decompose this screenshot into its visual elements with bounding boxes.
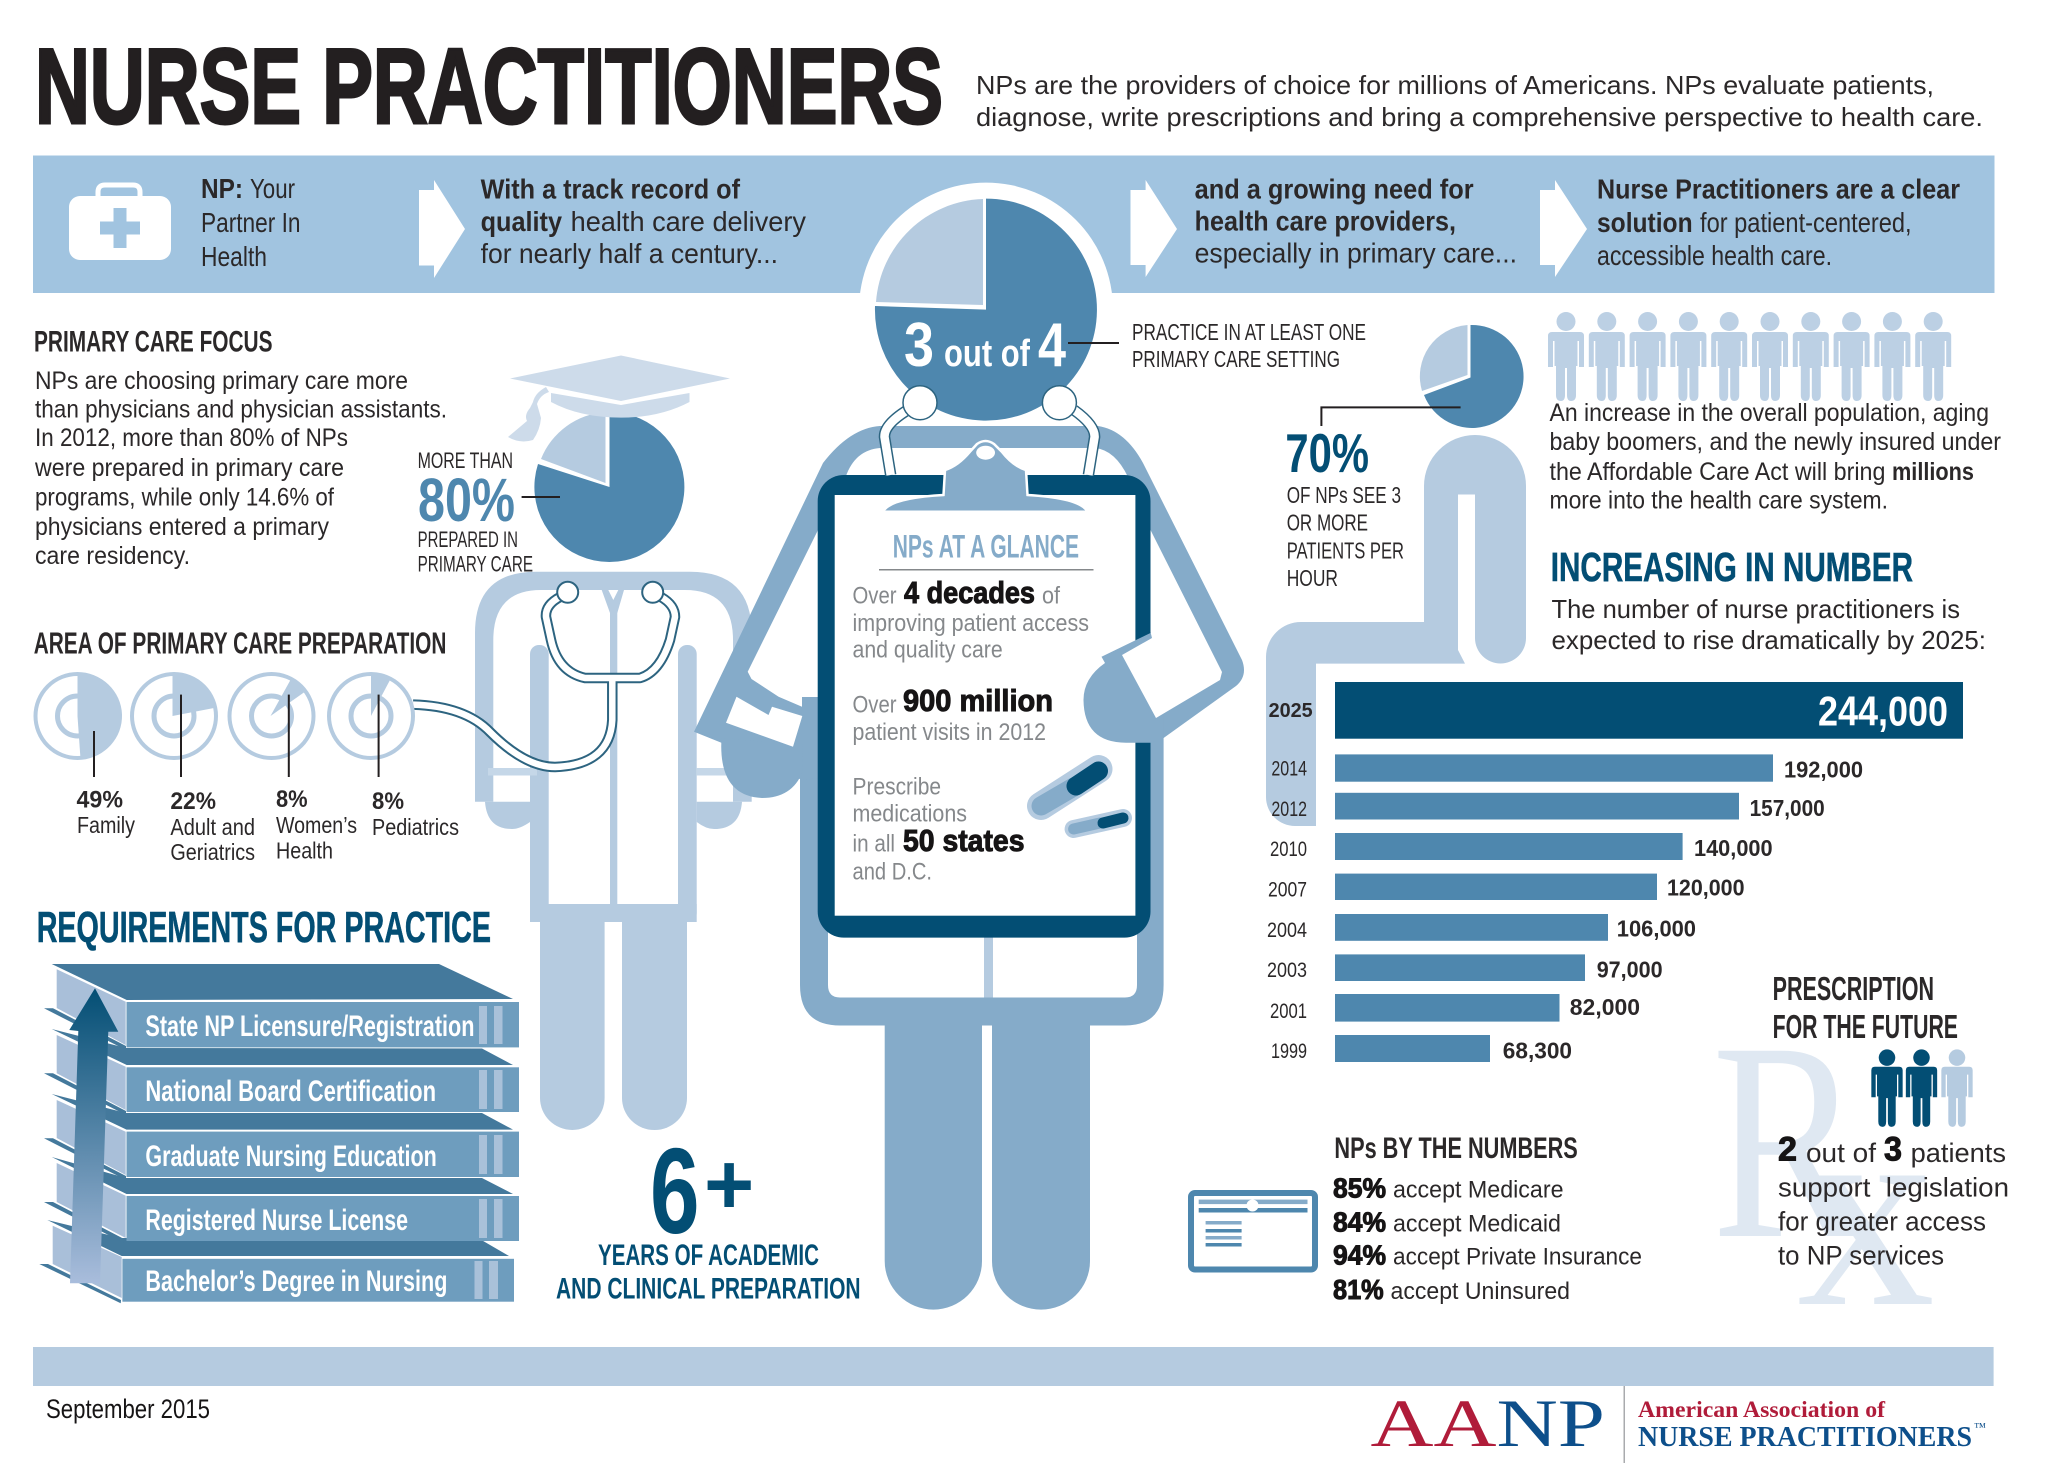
chart: pediatrics 8 percent: Pediatrics: [372, 814, 459, 840]
nps at a glance: 4 decades: [904, 575, 1035, 610]
bar chart: nurse practitioners by year: [1267, 682, 1963, 1063]
chart: pediatrics 8 percent: 8%: [372, 788, 404, 815]
nps at a glance: patient visits in 2012: [852, 719, 1046, 746]
book: state licensure: State NP Licensure/Registration: [145, 1010, 474, 1043]
coat: [800, 697, 1164, 1026]
population text: millions: [1892, 458, 1974, 486]
document in left hand: [726, 697, 802, 747]
increasing in number: The number of nurse practitioners is: [1552, 594, 1960, 624]
years of preparation: YEARS OF ACADEMIC: [598, 1239, 819, 1272]
nps at a glance: 50 states: [903, 823, 1024, 858]
figure: seated patient: [1266, 325, 1526, 826]
population text: the Affordable Care Act will bring: [1550, 458, 1885, 486]
bar 2007: 120,000: [1667, 875, 1744, 901]
70 percent callout: HOUR: [1287, 565, 1338, 591]
book: bachelor's degree: [39, 1220, 514, 1303]
nps at a glance: of: [1042, 582, 1060, 610]
80 percent callout: MORE THAN: [418, 448, 513, 473]
chart: family 49 percent: [36, 673, 135, 838]
prescription for the future: patients: [1911, 1138, 2006, 1168]
banner text: solution: for patient-centered,: [1700, 207, 1912, 238]
bar 2001: 2001: [1270, 1000, 1307, 1023]
book: registered nurse license: Registered Nurse License: [145, 1204, 408, 1237]
book: national board certification: [44, 1029, 519, 1115]
nps at a glance: Prescribe: [852, 774, 941, 800]
requirements heading: REQUIREMENTS FOR PRACTICE: [37, 903, 491, 952]
nps at a glance: Over: [852, 582, 896, 610]
increasing in number: expected to rise dramatically by 2025:: [1552, 625, 1986, 655]
nps at a glance: in all: [852, 830, 895, 858]
population text: more into the health care system.: [1550, 486, 1888, 514]
figure: central nurse: [694, 426, 1244, 1310]
icon: insurance card: [1191, 1193, 1315, 1270]
icon: pills: [1041, 769, 1123, 829]
nps by the numbers: 85%: [1333, 1172, 1386, 1204]
70 percent callout: 70%: [1285, 422, 1369, 484]
chart: adult and geriatrics 22 percent: Adult and: [170, 814, 255, 840]
80 percent callout: PREPARED IN: [418, 527, 518, 552]
primary care focus: programs, while only 14.6% of: [35, 484, 334, 512]
banner text: solution: Nurse Practitioners are a clear: [1597, 174, 1960, 205]
practice setting callout: PRACTICE IN AT LEAST ONE: [1132, 319, 1366, 345]
banner text: partner: [201, 173, 300, 272]
bar 2007: 2007: [1268, 879, 1307, 902]
rx watermark: [1712, 985, 1935, 1365]
pie: three out of four: 4: [1038, 311, 1066, 380]
book: bachelor's degree: Bachelor’s Degree in Nursing: [145, 1265, 447, 1298]
banner text: partner: NP:: [201, 173, 243, 204]
bar 2010: [1270, 833, 1773, 861]
chart: family 49 percent: Family: [77, 812, 135, 838]
bar 2003: [1267, 954, 1663, 982]
nps at a glance: and D.C.: [852, 858, 932, 886]
chart: family 49 percent: 49%: [76, 786, 123, 814]
clip hole: [976, 446, 995, 460]
bar 2012: 157,000: [1750, 795, 1825, 821]
nps at a glance: 900 million: [903, 683, 1053, 718]
left hand: [721, 738, 803, 798]
logo: AANP: American Association of: [1638, 1397, 1885, 1422]
pie: 80 percent: [534, 412, 684, 562]
80 percent callout: 80%: [418, 466, 515, 534]
icon: graduation cap: [508, 356, 730, 441]
book: graduate nursing education: Graduate Nursing Education: [145, 1140, 437, 1173]
book: graduate nursing education: [44, 1094, 519, 1180]
pie: 70 percent: [1420, 325, 1524, 428]
primary care focus: care residency.: [35, 542, 190, 570]
prescription for the future: out of: [1806, 1138, 1877, 1168]
clipboard: [818, 475, 1150, 938]
banner text: track record: quality: [481, 206, 562, 237]
primary care focus: than physicians and physician assistants.: [35, 396, 447, 424]
nps at a glance: [852, 529, 1094, 886]
shoulders and arms: [694, 426, 1244, 780]
chart: womens health 8 percent: Women’s: [276, 812, 357, 838]
logo: AANP: AA: [1370, 1385, 1496, 1461]
chart: pediatrics 8 percent: [329, 673, 459, 840]
bar 2010: 140,000: [1694, 835, 1773, 861]
bar 2025: 2025: [1269, 700, 1313, 722]
primary care focus: PRIMARY CARE FOCUS: [34, 326, 272, 359]
footer band: [33, 1347, 1994, 1386]
nps by the numbers: [1333, 1132, 1642, 1305]
bar 2012: [1271, 793, 1825, 821]
right hand: [1084, 633, 1164, 743]
banner text: growing need: especially in primary care...: [1195, 238, 1517, 268]
date: September 2015: [46, 1394, 210, 1424]
area of primary care preparation: [34, 625, 459, 865]
bar 2007: [1268, 874, 1744, 902]
nps at a glance: medications: [852, 800, 967, 828]
primary care focus: were prepared in primary care: [34, 454, 344, 482]
arrow: [419, 180, 465, 278]
nps by the numbers: 84%: [1333, 1207, 1386, 1238]
primary care focus: NPs are choosing primary care more: [35, 367, 408, 395]
70 percent callout: OR MORE: [1287, 510, 1368, 536]
coat and arms: [475, 572, 752, 1130]
bar 1999: 68,300: [1503, 1037, 1572, 1063]
banner text: solution: accessible health care.: [1597, 240, 1832, 271]
banner text: track record: health care delivery: [571, 206, 806, 237]
80 percent callout: [418, 448, 560, 577]
chart: womens health 8 percent: Health: [276, 838, 333, 864]
nps at a glance: and quality care: [852, 636, 1003, 664]
clipboard clip: [883, 441, 1088, 512]
nps by the numbers: 81%: [1333, 1274, 1384, 1305]
banner text: partner: Your: [250, 173, 295, 204]
population text: An increase in the overall population, aging: [1550, 399, 1989, 427]
logo: AANP: [1370, 1385, 1986, 1463]
book: state licensure: [44, 964, 519, 1050]
80 percent callout: PRIMARY CARE: [418, 552, 533, 577]
chart: adult and geriatrics 22 percent: 22%: [170, 788, 216, 815]
bar 2004: 2004: [1267, 919, 1307, 942]
70 percent callout: [1285, 407, 1461, 591]
bar 2012: 2012: [1271, 798, 1307, 821]
logo: AANP: NP: [1496, 1385, 1605, 1461]
bar 2014: 2014: [1271, 757, 1307, 780]
banner text: solution: [1597, 174, 1960, 271]
prescription for the future: to NP services: [1778, 1241, 1944, 1271]
nps by the numbers: NPs BY THE NUMBERS: [1334, 1132, 1578, 1165]
increasing in number: [1551, 544, 1986, 655]
arrow: [1130, 180, 1177, 277]
logo: AANP: NURSE PRACTITIONERS: [1638, 1421, 1972, 1453]
population text: [1550, 399, 2001, 514]
primary care focus: physicians entered a primary: [35, 513, 329, 541]
prescription for the future: support legislation: [1778, 1172, 2009, 1202]
bar 1999: 1999: [1271, 1040, 1307, 1063]
stethoscope: graduate nurse: [413, 582, 675, 767]
nps by the numbers: accept Uninsured: [1390, 1278, 1570, 1305]
primary care focus: In 2012, more than 80% of NPs: [35, 424, 348, 452]
pie: three out of four: out of: [944, 333, 1030, 375]
banner text: track record: [481, 174, 806, 269]
prescription for the future: for greater access: [1778, 1206, 1986, 1236]
practice setting callout: PRIMARY CARE SETTING: [1132, 346, 1340, 372]
bar 2025: 244,000: [1818, 688, 1948, 735]
intro text: diagnose, write prescriptions and bring a comprehensive perspective to health care.: [976, 102, 1983, 132]
book stack: [39, 964, 519, 1303]
increasing in number: INCREASING IN NUMBER: [1551, 544, 1913, 590]
rx watermark: R: [1712, 985, 1863, 1298]
practice setting callout: [1068, 319, 1366, 372]
area of primary care preparation: AREA OF PRIMARY CARE PREPARATION: [34, 625, 446, 660]
pie: three out of four: 3: [904, 311, 934, 380]
banner text: partner: Partner In: [201, 207, 300, 238]
years of preparation: +: [704, 1137, 754, 1233]
logo: AANP: ™: [1974, 1420, 1986, 1434]
prescription for the future: PRESCRIPTION: [1773, 970, 1934, 1007]
years of preparation: [556, 1123, 861, 1306]
70 percent callout: PATIENTS PER: [1287, 538, 1404, 564]
icon: three people: [1871, 1049, 1973, 1127]
rx watermark: x: [1797, 1054, 1935, 1365]
legs: [885, 1020, 1090, 1310]
nps by the numbers: accept Medicare: [1393, 1176, 1564, 1204]
arrow: [1540, 180, 1587, 277]
chart: adult and geriatrics 22 percent: Geriatrics: [170, 839, 255, 865]
bar 2004: [1267, 914, 1696, 942]
title: NURSE PRACTITIONERS: [35, 26, 943, 146]
banner text: growing need: health care providers,: [1195, 206, 1456, 237]
banner text: partner: Health: [201, 241, 267, 272]
arrow: rising requirements: [69, 988, 118, 1283]
top banner: [33, 156, 1994, 293]
nps by the numbers: 94%: [1333, 1240, 1386, 1271]
icon: row of ten people: [1548, 312, 1951, 401]
chart: womens health 8 percent: 8%: [276, 786, 308, 813]
banner text: growing need: [1195, 174, 1517, 268]
bar 2014: 192,000: [1784, 756, 1863, 782]
70 percent callout: OF NPs SEE 3: [1287, 482, 1401, 508]
prescription for the future: 2: [1778, 1131, 1797, 1169]
bar 2003: 97,000: [1597, 956, 1663, 982]
bar 2004: 106,000: [1617, 916, 1696, 942]
chart: womens health 8 percent: [230, 674, 357, 864]
book: registered nurse license: [44, 1157, 519, 1244]
intro text: [976, 70, 1983, 132]
pie: three out of four: [875, 199, 1097, 421]
prescription for the future: [1773, 970, 2009, 1271]
nps at a glance: NPs AT A GLANCE: [893, 529, 1079, 565]
nps at a glance: Over: [852, 691, 896, 718]
bar 2025: [1269, 682, 1963, 739]
bar 1999: [1271, 1035, 1572, 1063]
prescription for the future: 3: [1884, 1131, 1902, 1169]
bar 2003: 2003: [1267, 959, 1307, 982]
population text: baby boomers, and the newly insured under: [1550, 428, 2001, 456]
bar 2010: 2010: [1270, 838, 1307, 861]
bar 2014: [1271, 754, 1863, 782]
nps at a glance: improving patient access: [852, 610, 1089, 637]
nps by the numbers: accept Private Insurance: [1393, 1244, 1642, 1271]
intro text: NPs are the providers of choice for millions of Americans. NPs evaluate patients,: [976, 70, 1934, 100]
banner text: track record: for nearly half a century...: [481, 238, 778, 269]
pie backing ring: [859, 183, 1113, 437]
figure: graduate nurse: [475, 356, 752, 1130]
icon: medical kit: [69, 185, 171, 260]
banner text: solution: solution: [1597, 207, 1693, 238]
years of preparation: 6: [650, 1123, 700, 1259]
chart: adult and geriatrics 22 percent: [132, 673, 255, 865]
bar 2001: 82,000: [1570, 994, 1640, 1020]
years of preparation: AND CLINICAL PREPARATION: [556, 1272, 861, 1306]
nps by the numbers: accept Medicaid: [1393, 1211, 1561, 1238]
banner text: track record: With a track record of: [481, 174, 741, 204]
book: national board certification: National Board Certification: [145, 1075, 436, 1108]
primary care focus: [34, 326, 447, 570]
banner text: growing need: and a growing need for: [1195, 174, 1474, 205]
stethoscope: central nurse: [884, 386, 1095, 475]
bar 2001: [1270, 994, 1640, 1023]
